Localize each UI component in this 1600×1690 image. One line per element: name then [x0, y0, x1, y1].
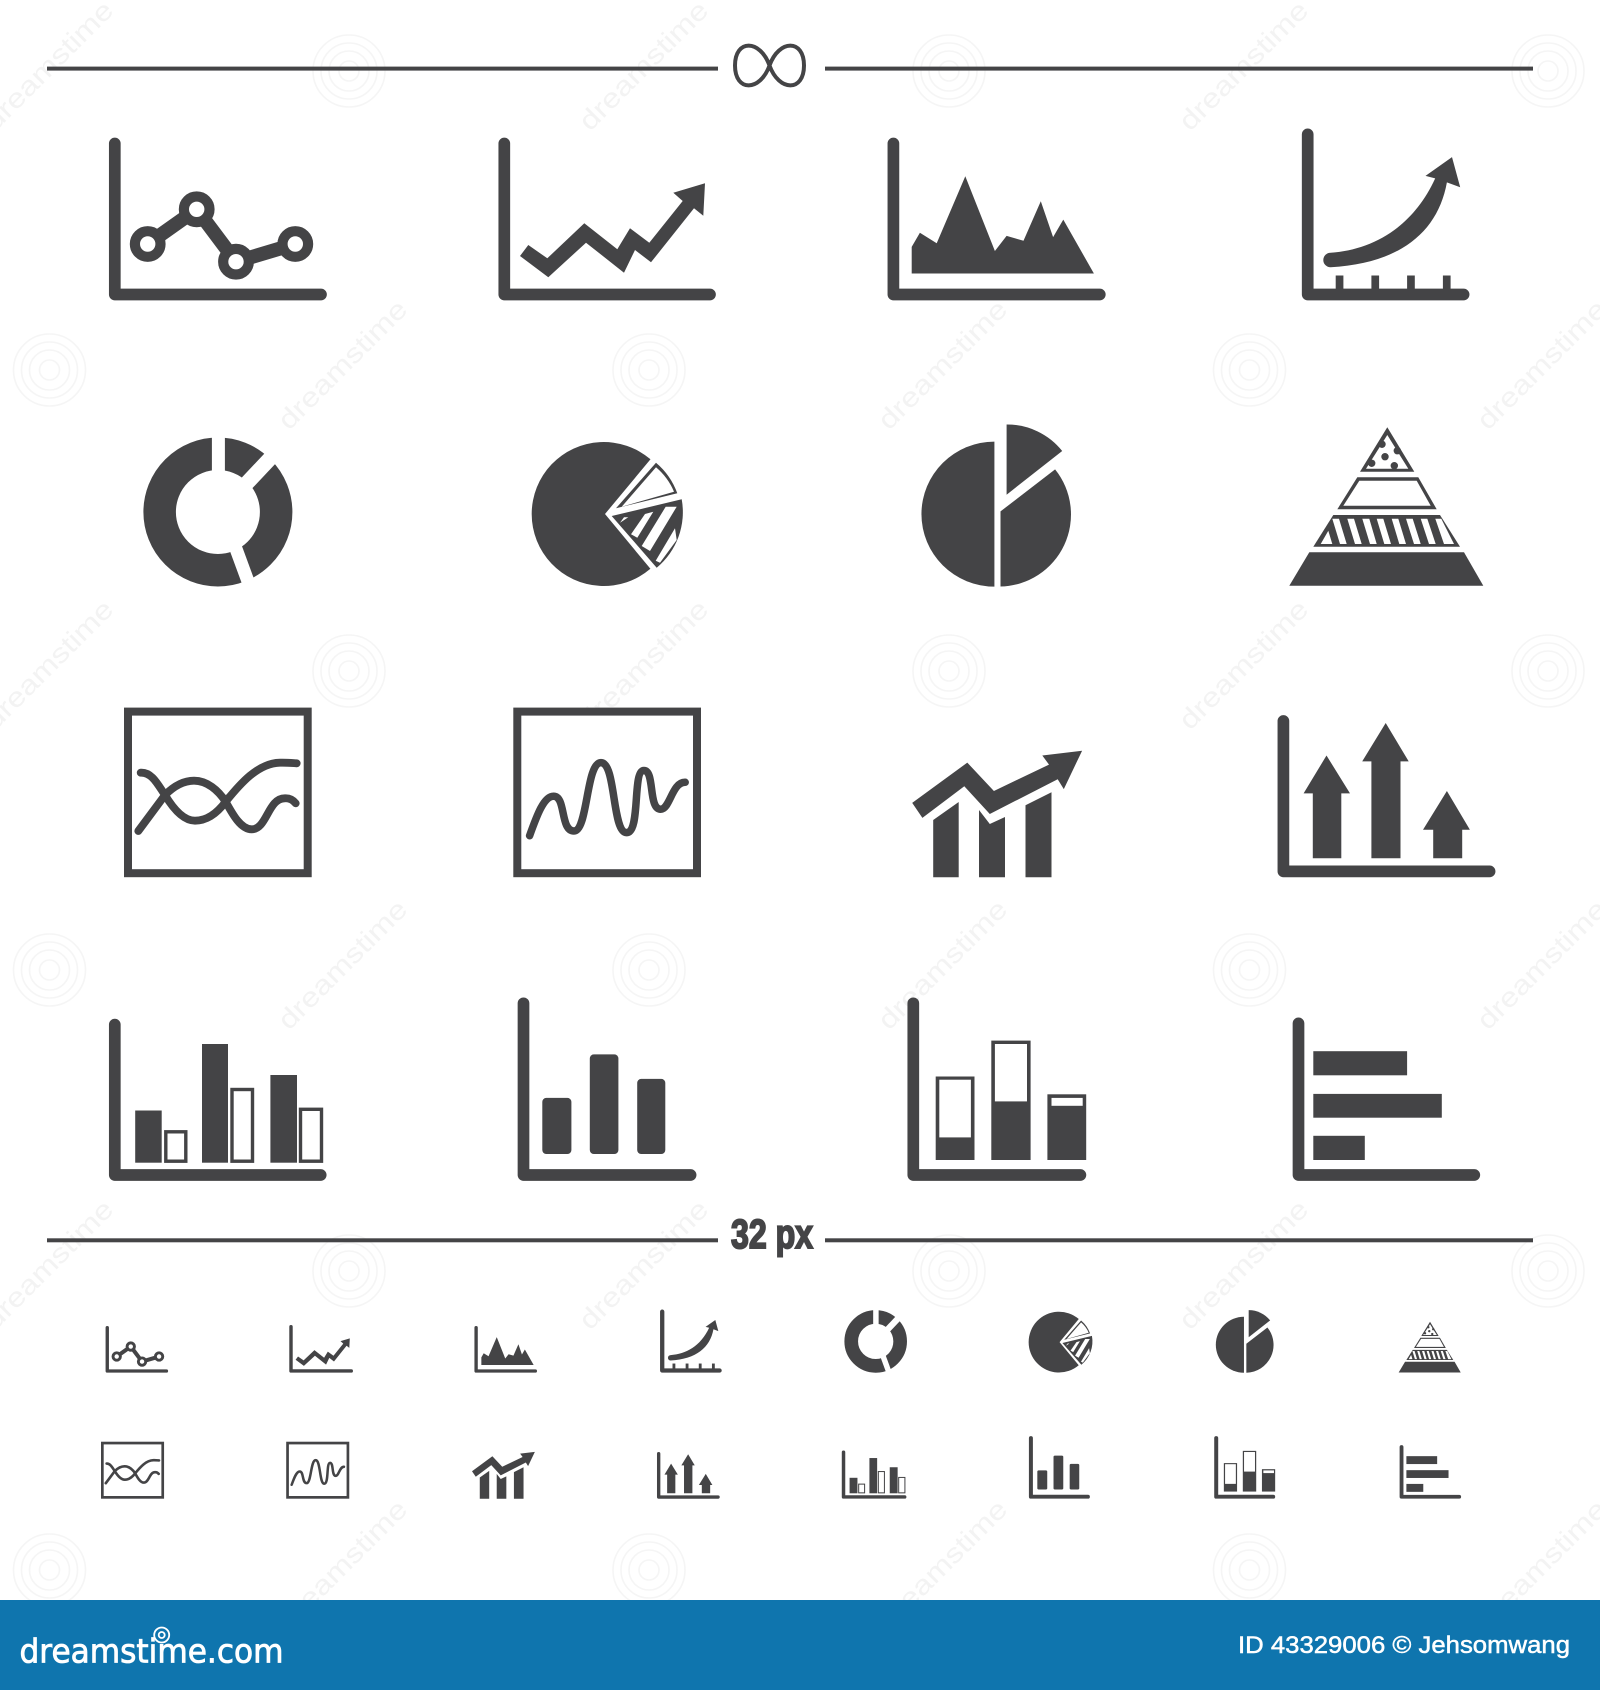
- top divider left: [47, 67, 718, 71]
- icon: line chart with circular points: [115, 144, 321, 294]
- watermark pattern: dreamstime: [1471, 1494, 1600, 1635]
- small icon: bars with trend arrow: [472, 1452, 535, 1499]
- small icon: horizontal bars: [1402, 1447, 1459, 1497]
- small icon: rising curve: [662, 1312, 720, 1371]
- icon: horizontal bar chart: [1298, 1023, 1474, 1175]
- divider left of 32 px label: [47, 1238, 718, 1242]
- heading: 32 px: 32 px: [731, 1211, 813, 1257]
- icon: pie chart with hatched wedges: [532, 442, 683, 586]
- brand: dreamstime.com: dreamstime.com: [20, 1632, 284, 1670]
- watermark pattern: dreamstime: [1471, 294, 1600, 435]
- watermark pattern: dreamstime: [872, 894, 1013, 1035]
- footer band: [0, 1600, 1600, 1690]
- icon: bars with trend arrow: [912, 751, 1082, 877]
- top divider right: [825, 67, 1533, 71]
- watermark pattern: dreamstime: [1173, 594, 1314, 735]
- watermark pattern: dreamstime: [1173, 1194, 1314, 1335]
- watermark pattern: dreamstime: [1173, 0, 1314, 136]
- watermark pattern: dreamstime: [872, 1494, 1013, 1635]
- small icon: framed wave: [288, 1443, 348, 1497]
- icon: framed crossing curves: [128, 712, 308, 873]
- small icon: hatched pie chart: [1029, 1312, 1092, 1372]
- small icon: framed crossing curves: [102, 1443, 163, 1497]
- small icon: pie with raised slice: [1216, 1310, 1274, 1373]
- small icon: paired bars: [844, 1452, 905, 1497]
- small icon: zigzag growth chart: [291, 1327, 351, 1371]
- small icon: donut chart: [851, 1305, 901, 1376]
- icon: layered pyramid: [1289, 427, 1483, 586]
- small icon: rounded bars: [1031, 1438, 1088, 1497]
- watermark pattern: dreamstime: [573, 0, 714, 136]
- icon: infinity symbol: [735, 46, 804, 85]
- icon: donut chart: [160, 425, 279, 595]
- small icon: line chart with points: [107, 1328, 166, 1371]
- icon: pie chart with raised slice: [921, 424, 1071, 587]
- icon: level bar chart: [913, 1003, 1086, 1175]
- watermark pattern: dreamstime: [272, 894, 413, 1035]
- icon: three up arrows chart: [1283, 721, 1490, 871]
- small icon: pyramid: [1399, 1322, 1461, 1372]
- watermark pattern: dreamstime: [573, 1194, 714, 1335]
- icon: area chart: [893, 144, 1100, 294]
- icon: paired bar chart: [115, 1025, 322, 1175]
- small icon: area chart: [476, 1328, 535, 1371]
- icon: rising curve arrow with ticks: [1308, 134, 1464, 294]
- watermark pattern: dreamstime: [872, 294, 1013, 435]
- small icon: level bars: [1216, 1438, 1275, 1497]
- watermark pattern: dreamstime: [573, 594, 714, 735]
- small icon: three up arrows: [659, 1454, 718, 1497]
- watermark pattern: dreamstime: [272, 1494, 413, 1635]
- icon: brand spiral: [154, 1628, 169, 1642]
- image id and credit: ID 43329006 © Jehsomwang: [1238, 1632, 1570, 1659]
- watermark pattern: dreamstime: [1471, 894, 1600, 1035]
- icon: zigzag growth arrow chart: [504, 144, 710, 294]
- icon: rounded bar chart: [524, 1003, 691, 1175]
- divider right of 32 px label: [825, 1238, 1533, 1242]
- icon: framed wave line: [517, 712, 697, 873]
- watermark pattern: dreamstime: [272, 294, 413, 435]
